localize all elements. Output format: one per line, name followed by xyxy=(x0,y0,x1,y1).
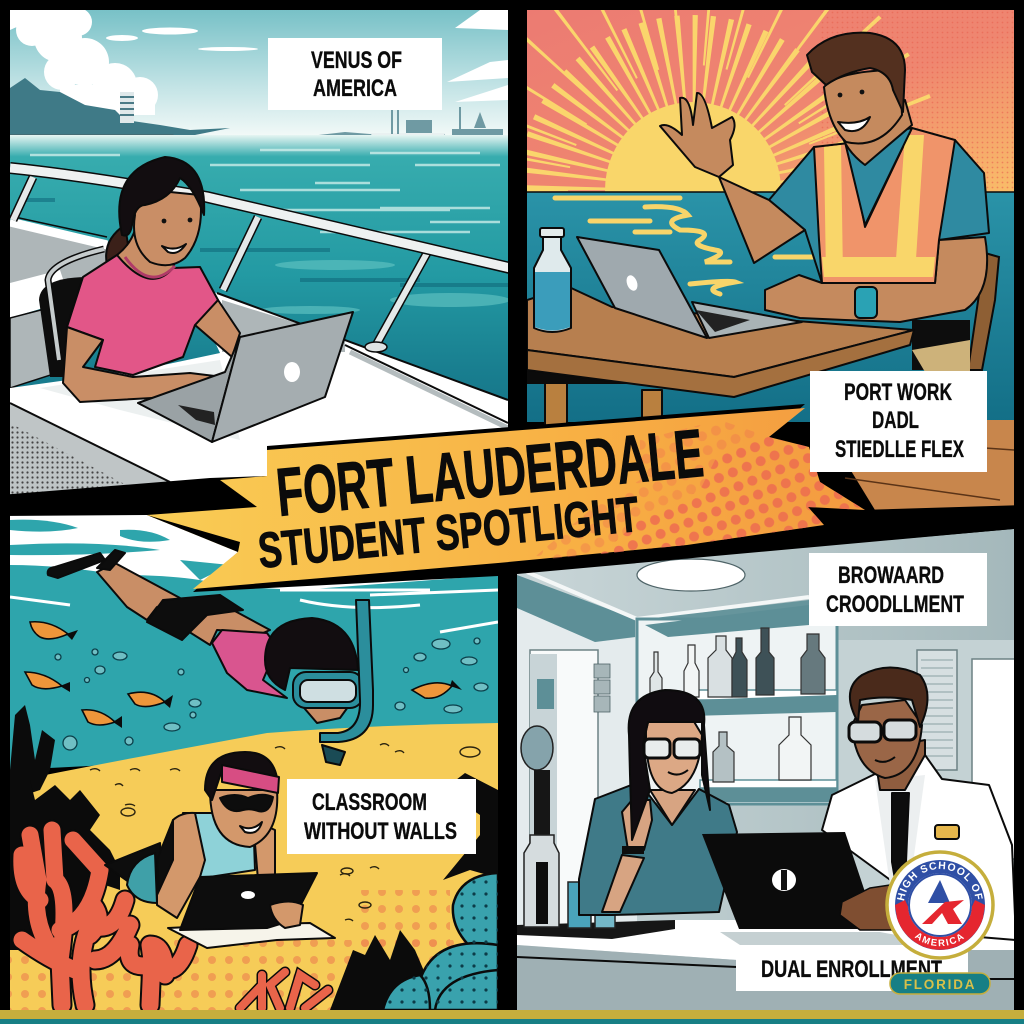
bubbles xyxy=(55,638,488,750)
sea xyxy=(10,135,508,399)
left wall xyxy=(517,608,637,950)
label: Port Work: DADL xyxy=(872,407,919,434)
water bottle xyxy=(534,228,571,332)
label: Classroom Without Walls: WITHOUT WALLS xyxy=(304,818,457,845)
label: Venus of America xyxy=(268,38,442,110)
comic gutters xyxy=(498,0,527,1024)
banner title text xyxy=(256,415,707,579)
ceiling beam xyxy=(527,572,809,619)
logo: Florida pill: FLORIDA xyxy=(904,977,976,992)
clouds xyxy=(10,8,508,115)
surface stripes xyxy=(10,520,498,770)
sand marks xyxy=(90,744,480,921)
microscope and bottle xyxy=(521,726,559,927)
ceiling lamp xyxy=(637,559,745,591)
woman student xyxy=(579,690,737,915)
banner title text: STUDENT SPOTLIGHT xyxy=(256,486,641,579)
label: Venus of America: AMERICA xyxy=(313,75,397,102)
sea xyxy=(527,192,1014,422)
label: Venus of America: VENUS OF xyxy=(311,47,402,74)
black laptop xyxy=(702,832,874,929)
label: Port Work: STIEDLLE FLEX xyxy=(835,436,964,463)
label: Dual Enrollment: DUAL ENROLLMENT xyxy=(761,956,942,983)
bottom strip xyxy=(0,1010,1024,1024)
black coral silhouettes xyxy=(10,705,498,1010)
laptop xyxy=(138,312,353,442)
hand on laptop xyxy=(840,885,895,930)
panel: snorkel classroom xyxy=(10,490,498,1010)
desk xyxy=(517,920,1014,960)
label: Port Work xyxy=(810,371,987,472)
boat hull and deck xyxy=(10,220,108,283)
label: Classroom Without Walls: CLASSROOM xyxy=(312,789,427,816)
small red coral xyxy=(240,972,328,1008)
wood dock xyxy=(852,420,1014,510)
tray xyxy=(517,920,675,939)
girl with tablet on the sand xyxy=(105,752,335,948)
sand xyxy=(10,723,498,1010)
fridge xyxy=(530,650,610,925)
teal soffit xyxy=(517,575,635,642)
logo: High School of America badge: AMERICA xyxy=(914,933,964,946)
snorkeling diver xyxy=(48,550,373,765)
red corals xyxy=(22,830,188,1005)
teal corals xyxy=(383,873,498,1010)
distant island and quay xyxy=(10,78,230,135)
sun rays xyxy=(527,10,931,192)
logo: Florida pill xyxy=(890,973,990,994)
laptop xyxy=(577,237,802,338)
trousers xyxy=(912,320,970,370)
label: Dual Enrollment xyxy=(736,949,968,991)
chair xyxy=(39,249,104,377)
shelf unit with bottles xyxy=(637,605,837,804)
title banner xyxy=(0,404,1024,592)
logo: High School of America badge: HIGH SCHOOL OF xyxy=(897,862,983,901)
sun xyxy=(605,102,781,192)
window blinds xyxy=(917,650,957,770)
boat railing xyxy=(10,168,510,352)
beakers xyxy=(568,882,615,928)
panel: boat at sea xyxy=(10,8,510,495)
logo: High School of America badge xyxy=(885,850,995,960)
doorway xyxy=(972,659,1016,859)
right wall xyxy=(838,640,1014,890)
man in safety vest xyxy=(660,33,989,322)
sun reflection xyxy=(555,198,815,294)
label: Browaard Croodllment xyxy=(809,553,987,626)
panel: lab dual enrollment xyxy=(517,525,1016,1010)
distant ships xyxy=(319,107,503,135)
label: Port Work: PORT WORK xyxy=(844,379,952,406)
label: Classroom Without Walls xyxy=(287,779,476,854)
label: Browaard Croodllment: BROWAARD xyxy=(838,562,944,589)
student in pink shirt xyxy=(63,157,240,410)
fish school xyxy=(25,622,462,728)
panel: sunset port work xyxy=(503,0,1014,510)
chair xyxy=(968,253,999,370)
man in lab coat xyxy=(822,668,1016,940)
banner title text: FORT LAUDERDALE xyxy=(273,415,707,531)
table legs xyxy=(544,384,663,424)
label: Browaard Croodllment: CROODLLMENT xyxy=(826,591,964,618)
table xyxy=(527,287,914,397)
